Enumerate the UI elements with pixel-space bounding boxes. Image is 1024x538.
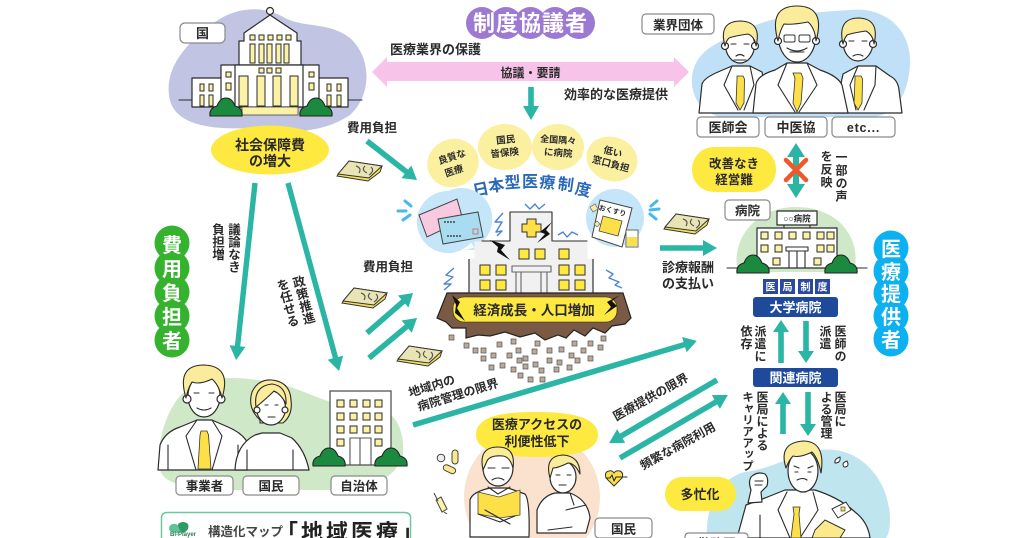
text: medical fee payment: 診療報酬 bbox=[662, 260, 714, 275]
icon: pills bbox=[437, 450, 458, 475]
callout: reduced access to care: 医療アクセスの bbox=[492, 417, 582, 432]
bubble: universal coverage bbox=[478, 124, 532, 170]
icon: cyan sparks bbox=[398, 201, 659, 220]
text: burden increase without debate: 議論なき bbox=[226, 222, 240, 273]
panel: reduced access bbox=[434, 412, 652, 538]
arrow: down into system bbox=[523, 87, 539, 120]
arrow: cost burden top bbox=[362, 135, 422, 186]
icon: national diet building bbox=[179, 8, 362, 116]
panel: cost bearers group bbox=[158, 365, 407, 495]
text: management by bureau: 医局に bbox=[833, 391, 847, 427]
heading: care providers: 医 bbox=[881, 239, 901, 261]
heading: Japanese-style healthcare system: 療 bbox=[539, 173, 556, 193]
label: industry groups: 業界団体 bbox=[653, 18, 703, 32]
arrow: dispatch down bbox=[798, 321, 814, 363]
arrow: cost burden lower one bbox=[362, 287, 418, 339]
callout: rising social security costs bbox=[211, 126, 329, 174]
heading: cost bearers bbox=[154, 226, 190, 358]
label: medical bureau system bbox=[763, 279, 830, 294]
label: industry groups bbox=[642, 14, 714, 34]
icon: hospital building: ○○病院 bbox=[783, 214, 811, 224]
bubble: insurance cards bbox=[417, 188, 492, 253]
label: medical association: 医師会 bbox=[708, 120, 748, 135]
label: etc: etc... bbox=[847, 121, 880, 135]
arrow: career up bbox=[775, 392, 791, 434]
text: dispatching doctors: 派遣 bbox=[818, 325, 832, 350]
label: medical bureau system: 制 bbox=[800, 280, 810, 294]
figure: association member right bbox=[835, 18, 902, 113]
callout: reduced access to care bbox=[476, 412, 598, 457]
text: policy promotion delegated: 政策推進 bbox=[289, 273, 316, 327]
bubble: medicine notebook bbox=[586, 189, 644, 247]
blob: green background bbox=[159, 378, 403, 490]
icon: crack lightning bolts bbox=[448, 222, 620, 322]
box: affiliated hospital: 関連病院 bbox=[769, 370, 822, 386]
label: kuni bbox=[180, 23, 225, 43]
callout: management difficulties: 経営難 bbox=[715, 172, 753, 187]
bubble: hospitals everywhere: に病院 bbox=[544, 146, 573, 160]
text: dependent on dispatch: 派遣に bbox=[753, 325, 767, 362]
figure: association member left bbox=[699, 21, 770, 113]
figure: elderly woman bbox=[537, 455, 590, 533]
text: dispatching doctors bbox=[818, 325, 847, 362]
figure: citizen bbox=[235, 380, 309, 470]
arrow: policy delegated down bbox=[280, 181, 347, 373]
heading: Japanese-style healthcare system bbox=[471, 173, 593, 201]
text: some voices reflected: を反映 bbox=[819, 150, 833, 189]
arrow: dispatch up bbox=[773, 320, 789, 363]
label: medical bureau system: 局 bbox=[782, 282, 792, 294]
heading: Japanese-style healthcare system: 医 bbox=[522, 174, 538, 191]
text: protect the medical industry: 医療業界の保護 bbox=[390, 42, 481, 57]
text: policy promotion delegated: を任せる bbox=[273, 277, 300, 329]
heading: cost bearers: 負 bbox=[162, 282, 182, 305]
text: management by bureau: よる管理 bbox=[819, 391, 833, 439]
label: medical bureau system: 度 bbox=[818, 280, 828, 294]
heading: cost bearers: 者 bbox=[162, 330, 182, 353]
icon: municipal building bbox=[313, 391, 407, 466]
text: burden increase without debate bbox=[210, 222, 240, 273]
label: citizens: 国民 bbox=[258, 480, 284, 494]
text: career advancement via bureau: 医局による bbox=[755, 391, 769, 451]
heading: care providers: 供 bbox=[881, 306, 901, 329]
arrow: burden increase down bbox=[228, 182, 263, 361]
label: hospital bbox=[725, 200, 770, 220]
heading: system stakeholders: 制度協議者 bbox=[473, 11, 588, 36]
callout: rising social security costs: の増大 bbox=[249, 153, 291, 169]
heading: cost bearers: 担 bbox=[162, 306, 182, 329]
text: policy promotion delegated bbox=[273, 273, 316, 329]
foundation: crumbling ground bbox=[437, 293, 631, 340]
callout: management difficulties bbox=[692, 147, 776, 192]
label: municipality: 自治体 bbox=[340, 478, 378, 494]
label: medical association bbox=[697, 117, 759, 137]
arrow: medical fee payment bbox=[660, 240, 717, 256]
callout: management difficulties: 改善なき bbox=[709, 156, 759, 171]
label: business owners: 事業者 bbox=[186, 478, 223, 494]
figure: busy doctor bbox=[737, 441, 870, 538]
bubble: low copay: 低い bbox=[602, 144, 624, 160]
text: management by bureau bbox=[819, 391, 847, 439]
text: medical fee payment: の支払い bbox=[662, 276, 714, 291]
label: medical bureau system: 医 bbox=[766, 282, 776, 294]
text: limits of regional hospital management: 地域内の bbox=[406, 371, 457, 400]
box: university hospital bbox=[753, 297, 838, 317]
bubble: universal coverage: 皆保険 bbox=[490, 146, 520, 160]
icon: syringe bbox=[434, 493, 447, 514]
arrow: frequent hospital use bbox=[616, 388, 732, 465]
callout: economic growth and population growth bbox=[453, 297, 617, 322]
panel: industry groups bbox=[642, 6, 910, 137]
text: some voices reflected: 一部の声 bbox=[834, 151, 848, 203]
text: cost burden top: 費用負担 bbox=[347, 120, 398, 135]
text: cost burden mid: 費用負担 bbox=[363, 259, 414, 274]
label: kuni: 国 bbox=[196, 26, 209, 41]
text: dependent on dispatch: 依存 bbox=[739, 324, 753, 350]
bubble: hospitals everywhere: 全国隅々 bbox=[540, 133, 577, 146]
heading: Japanese-style healthcare system: 日 bbox=[471, 181, 491, 201]
heading: cost bearers: 費 bbox=[162, 234, 182, 257]
arrow: regional management limit bbox=[411, 333, 699, 433]
label: citizens: 国民 bbox=[611, 522, 636, 536]
arrow: negotiation and requests bbox=[372, 57, 689, 87]
heading: system stakeholders bbox=[466, 7, 595, 39]
medical bureau system bbox=[739, 279, 847, 472]
icon: hospital building bbox=[727, 211, 867, 273]
callout: overwork bbox=[665, 477, 736, 511]
label: hospital: 病院 bbox=[735, 204, 760, 218]
rubble: falling debris bbox=[449, 335, 606, 382]
label: etc bbox=[832, 117, 895, 137]
label: chuikyo bbox=[765, 117, 827, 137]
heading: Japanese-style healthcare system: 本 bbox=[487, 176, 505, 196]
text: burden increase without debate: 負担増 bbox=[210, 222, 224, 261]
text: dependent on dispatch bbox=[739, 324, 767, 362]
callout: reduced access to care: 利便性低下 bbox=[504, 434, 570, 449]
arrow: management down bbox=[800, 392, 816, 436]
callout: economic growth and population growth: 経済成長・人口増加 bbox=[473, 302, 595, 318]
heading: care providers bbox=[874, 230, 908, 356]
callout: overwork: 多忙化 bbox=[680, 487, 720, 502]
text: some voices reflected bbox=[819, 150, 848, 203]
heading: care providers: 提 bbox=[881, 283, 901, 306]
arrow: blocked two-way with red cross bbox=[786, 143, 806, 198]
figure: association member center with glasses bbox=[753, 6, 848, 113]
label: citizens bbox=[243, 476, 299, 495]
text: limit of care delivery: 医療提供の限界 bbox=[610, 370, 691, 424]
icon: ground lightning bolts bbox=[452, 295, 620, 321]
text: limits of regional hospital management: 病院管理の限界 bbox=[415, 375, 500, 414]
figure: business owner bbox=[158, 365, 248, 470]
blob: hospital background bbox=[737, 207, 856, 272]
heading: cost bearers: 用 bbox=[162, 259, 182, 281]
text: dispatching doctors: 医師の bbox=[833, 325, 847, 362]
arrow: care delivery limit bbox=[605, 373, 721, 450]
arrow: cost burden lower two bbox=[364, 312, 422, 364]
bubble: low copay: 窓口負担 bbox=[591, 153, 631, 175]
bubble: low copay bbox=[580, 129, 644, 189]
bubble: universal coverage: 国民 bbox=[496, 134, 516, 147]
blob: industry background bbox=[692, 10, 910, 117]
panel: government bbox=[169, 8, 366, 174]
icon: hospital building bbox=[469, 212, 593, 293]
money icons bbox=[337, 161, 709, 366]
title box: frame for structured map bbox=[162, 512, 410, 538]
box: affiliated hospital bbox=[753, 368, 838, 387]
bubble: hospitals everywhere bbox=[532, 124, 584, 170]
bubbles: four system features bbox=[420, 124, 644, 194]
label: working doctors frame bbox=[685, 533, 748, 538]
bubble: medicine notebook: おくすり bbox=[598, 203, 627, 218]
bubble: quality care: 良質な bbox=[437, 147, 468, 167]
callout: rising social security costs: 社会保障費 bbox=[235, 137, 305, 153]
text: frequent hospital use: 頻繁な病院利用 bbox=[637, 419, 718, 473]
heading: care providers: 者 bbox=[881, 329, 901, 352]
panel: hospital bbox=[725, 200, 867, 273]
panel: working doctors bbox=[665, 441, 890, 538]
label: business owners bbox=[176, 476, 233, 495]
text: medical fee payment bbox=[662, 260, 714, 291]
label: citizens bbox=[595, 518, 652, 538]
icon: heart with pulse bbox=[605, 471, 627, 486]
heading: care providers: 療 bbox=[881, 261, 901, 284]
arrow: negotiation and requests: 協議・要請 bbox=[500, 65, 561, 80]
figure: elderly man bbox=[470, 447, 529, 537]
icon: blue shock squiggles bbox=[444, 204, 622, 290]
text: efficient care delivery: 効率的な医療提供 bbox=[564, 87, 668, 102]
heading: Japanese-style healthcare system: 度 bbox=[573, 179, 593, 201]
logo: Bi-Player hearts bbox=[169, 522, 197, 538]
box: university hospital: 大学病院 bbox=[769, 300, 822, 315]
text: career advancement via bureau bbox=[741, 391, 769, 472]
blob: cyan background bbox=[707, 450, 890, 538]
logo: Bi-Player hearts: Bi-Player bbox=[170, 532, 197, 538]
panel: crumbling hospital bbox=[398, 188, 659, 382]
blob: government background bbox=[169, 9, 366, 131]
label: municipality bbox=[331, 476, 387, 495]
bubble: quality care: 医療 bbox=[443, 162, 465, 180]
heading: Japanese-style healthcare system: 型 bbox=[504, 173, 521, 193]
heading: Japanese-style healthcare system: 制 bbox=[557, 175, 575, 195]
bubble: quality care bbox=[420, 132, 486, 194]
label: chuikyo: 中医協 bbox=[776, 120, 816, 135]
blob: peach background bbox=[464, 429, 600, 538]
text: career advancement via bureau: キャリアアップ bbox=[741, 391, 753, 472]
